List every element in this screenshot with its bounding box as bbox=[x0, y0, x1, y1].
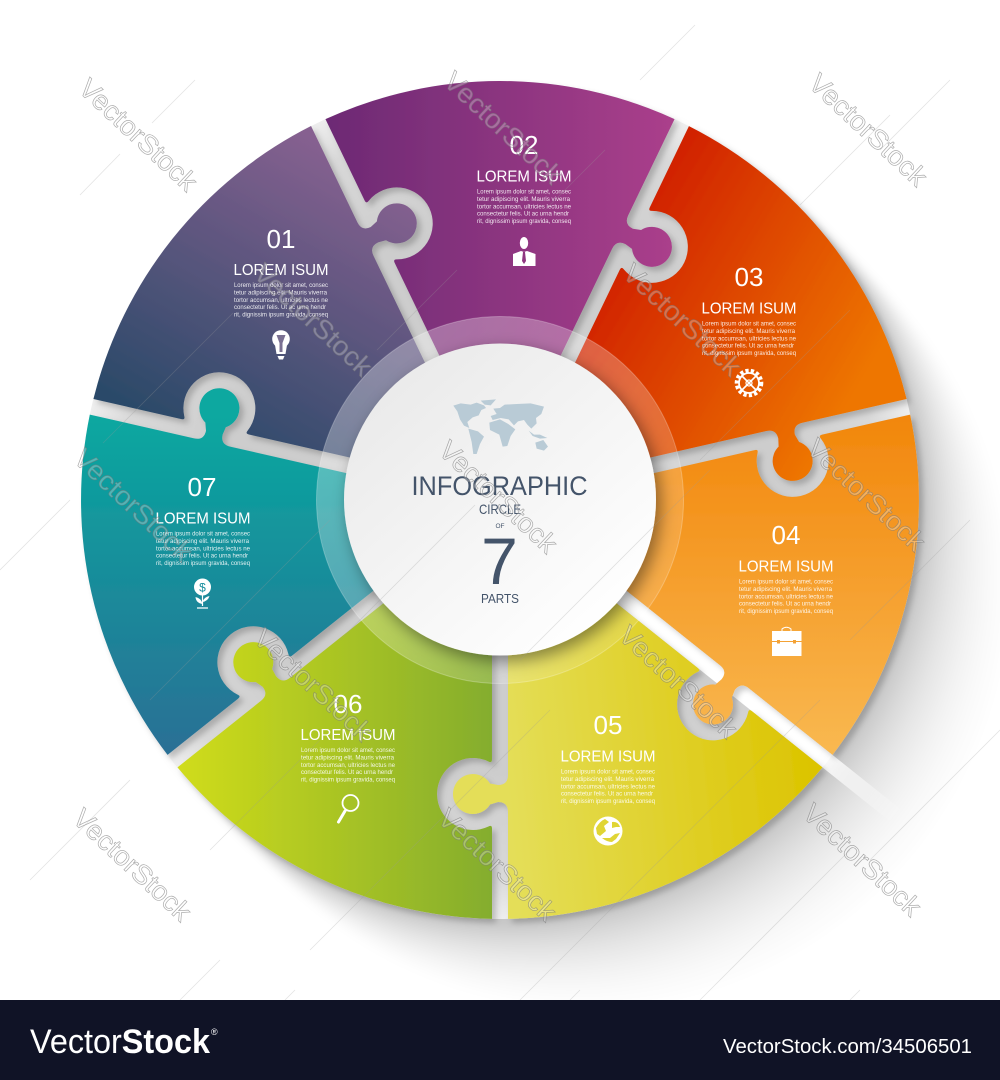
watermarks bbox=[67, 66, 933, 927]
icon: briefcase bbox=[772, 627, 802, 656]
text block 05 bbox=[561, 768, 656, 805]
text block 05: rit, dignissim ipsum gravida, conseq bbox=[561, 798, 655, 805]
icon: world map bbox=[453, 399, 548, 454]
watermarks: VectorStock bbox=[67, 803, 197, 927]
watermarks: VectorStock bbox=[68, 443, 198, 567]
text block 02: Lorem ipsum dolor sit amet, consec bbox=[477, 188, 572, 196]
text block 04: rit, dignissim ipsum gravida, conseq bbox=[739, 608, 833, 615]
text block 06: tetur adipiscing elit. Mauris viverra bbox=[301, 754, 394, 761]
text block 02: consectetur felis. Ut ac urna hendr bbox=[477, 211, 570, 218]
icon: gear bbox=[737, 371, 761, 395]
number 01: 01 bbox=[267, 224, 295, 254]
text block 07 bbox=[156, 530, 251, 567]
text block 03: Lorem ipsum dolor sit amet, consec bbox=[702, 320, 797, 328]
text block 07: Lorem ipsum dolor sit amet, consec bbox=[156, 530, 251, 538]
text block 06: Lorem ipsum dolor sit amet, consec bbox=[301, 747, 396, 754]
subtitle parts: PARTS bbox=[481, 591, 519, 606]
text block 02: tetur adipiscing elit. Mauris viverra bbox=[477, 196, 570, 203]
footer logo: VectorStock bbox=[30, 1023, 210, 1061]
text block 03 bbox=[702, 320, 797, 357]
icon: globe bbox=[594, 816, 622, 846]
heading 02: LOREM ISUM bbox=[476, 168, 572, 186]
wheel base behind the gaps bbox=[81, 81, 919, 919]
text block 01: tetur adipiscing elit. Mauris viverra bbox=[234, 289, 327, 296]
text block 06: tortor accumsan, ultricies lectus ne bbox=[301, 762, 395, 769]
text block 02: rit, dignissim ipsum gravida, conseq bbox=[477, 218, 571, 225]
text block 06 bbox=[301, 747, 396, 784]
text block 01: consectetur felis. Ut ac urna hendr bbox=[234, 304, 327, 311]
number seven: 7 bbox=[481, 524, 518, 598]
number 04: 04 bbox=[772, 520, 800, 550]
watermarks: VectorStock bbox=[613, 620, 743, 744]
icon: businessman bbox=[513, 237, 536, 266]
number 03: 03 bbox=[735, 262, 763, 292]
text block 07: consectetur felis. Ut ac urna hendr bbox=[156, 553, 249, 560]
text block 05: Lorem ipsum dolor sit amet, consec bbox=[561, 768, 656, 776]
text block 06: consectetur felis. Ut ac urna hendr bbox=[301, 769, 394, 776]
subtitle circle: CIRCLE bbox=[479, 501, 521, 517]
text block 01: tortor accumsan, ultricies lectus ne bbox=[234, 297, 328, 304]
panel: part 04 bbox=[484, 258, 1000, 798]
text block 03: tetur adipiscing elit. Mauris viverra bbox=[702, 328, 795, 335]
watermarks: VectorStock bbox=[248, 258, 378, 382]
watermarks: VectorStock bbox=[803, 68, 933, 192]
text block 03: consectetur felis. Ut ac urna hendr bbox=[702, 343, 795, 350]
panel: part 05 bbox=[453, 517, 822, 919]
long shadow of the wheel bbox=[87, 87, 1000, 1005]
panel: part 02 bbox=[217, 0, 724, 505]
watermarks: VectorStock bbox=[617, 258, 747, 382]
icon: light bulb bbox=[272, 330, 290, 360]
light strip through gap 04/05 bbox=[604, 581, 904, 824]
text block 05: consectetur felis. Ut ac urna hendr bbox=[561, 791, 654, 798]
text block 04: tortor accumsan, ultricies lectus ne bbox=[739, 593, 833, 600]
icon: magnifier bbox=[338, 795, 358, 822]
number 06: 06 bbox=[334, 689, 362, 719]
text block 01 bbox=[234, 282, 329, 319]
text block 04 bbox=[739, 578, 834, 615]
text block 01: Lorem ipsum dolor sit amet, consec bbox=[234, 282, 329, 289]
footer band bbox=[0, 1000, 1000, 1080]
text block 02 bbox=[477, 188, 572, 225]
number 07: 07 bbox=[188, 472, 216, 502]
text block 03: tortor accumsan, ultricies lectus ne bbox=[702, 335, 796, 342]
text block 04: consectetur felis. Ut ac urna hendr bbox=[739, 601, 832, 608]
number 02: 02 bbox=[510, 130, 538, 160]
heading 07: LOREM ISUM bbox=[156, 510, 250, 528]
watermarks: VectorStock bbox=[248, 623, 378, 747]
heading 05: LOREM ISUM bbox=[560, 748, 656, 766]
translucent ring bbox=[316, 316, 684, 684]
watermarks: VectorStock bbox=[73, 73, 203, 197]
text block 05: tortor accumsan, ultricies lectus ne bbox=[561, 783, 655, 790]
text block 07: tetur adipiscing elit. Mauris viverra bbox=[156, 538, 249, 545]
icon: money plant bbox=[194, 578, 211, 608]
heading 04: LOREM ISUM bbox=[738, 558, 834, 576]
heading 01: LOREM ISUM bbox=[234, 262, 328, 279]
footer registered mark: ® bbox=[211, 1027, 218, 1037]
text block 06: rit, dignissim ipsum gravida, conseq bbox=[301, 777, 395, 784]
panel: part 03 bbox=[444, 92, 919, 542]
text block 02: tortor accumsan, ultricies lectus ne bbox=[477, 203, 571, 210]
text block 04: Lorem ipsum dolor sit amet, consec bbox=[739, 578, 834, 586]
text block 07: tortor accumsan, ultricies lectus ne bbox=[156, 545, 250, 552]
text block 05: tetur adipiscing elit. Mauris viverra bbox=[561, 776, 654, 783]
heading 06: LOREM ISUM bbox=[300, 727, 396, 744]
text block 01: rit, dignissim ipsum gravida, conseq bbox=[234, 312, 328, 319]
panel: part 07 bbox=[20, 361, 494, 811]
icon: money plant: $ bbox=[199, 580, 206, 594]
subtitle of: OF bbox=[495, 523, 505, 530]
panel: part 01 bbox=[28, 102, 535, 625]
heading 03: LOREM ISUM bbox=[702, 300, 796, 318]
text block 04: tetur adipiscing elit. Mauris viverra bbox=[739, 586, 832, 593]
watermarks: VectorStock bbox=[797, 798, 927, 922]
watermarks: VectorStock bbox=[432, 803, 562, 927]
panel: part 06 bbox=[143, 474, 688, 1013]
watermarks: VectorStock bbox=[438, 66, 568, 190]
number 05: 05 bbox=[594, 710, 622, 740]
panel: centre disc bbox=[344, 344, 656, 656]
footer url: VectorStock.com/34506501 bbox=[723, 1036, 972, 1058]
watermarks: VectorStock bbox=[433, 435, 563, 559]
text block 07: rit, dignissim ipsum gravida, conseq bbox=[156, 560, 250, 567]
title: INFOGRAPHIC bbox=[412, 471, 588, 501]
text block 03: rit, dignissim ipsum gravida, conseq bbox=[702, 350, 796, 357]
watermarks: VectorStock bbox=[801, 433, 931, 557]
